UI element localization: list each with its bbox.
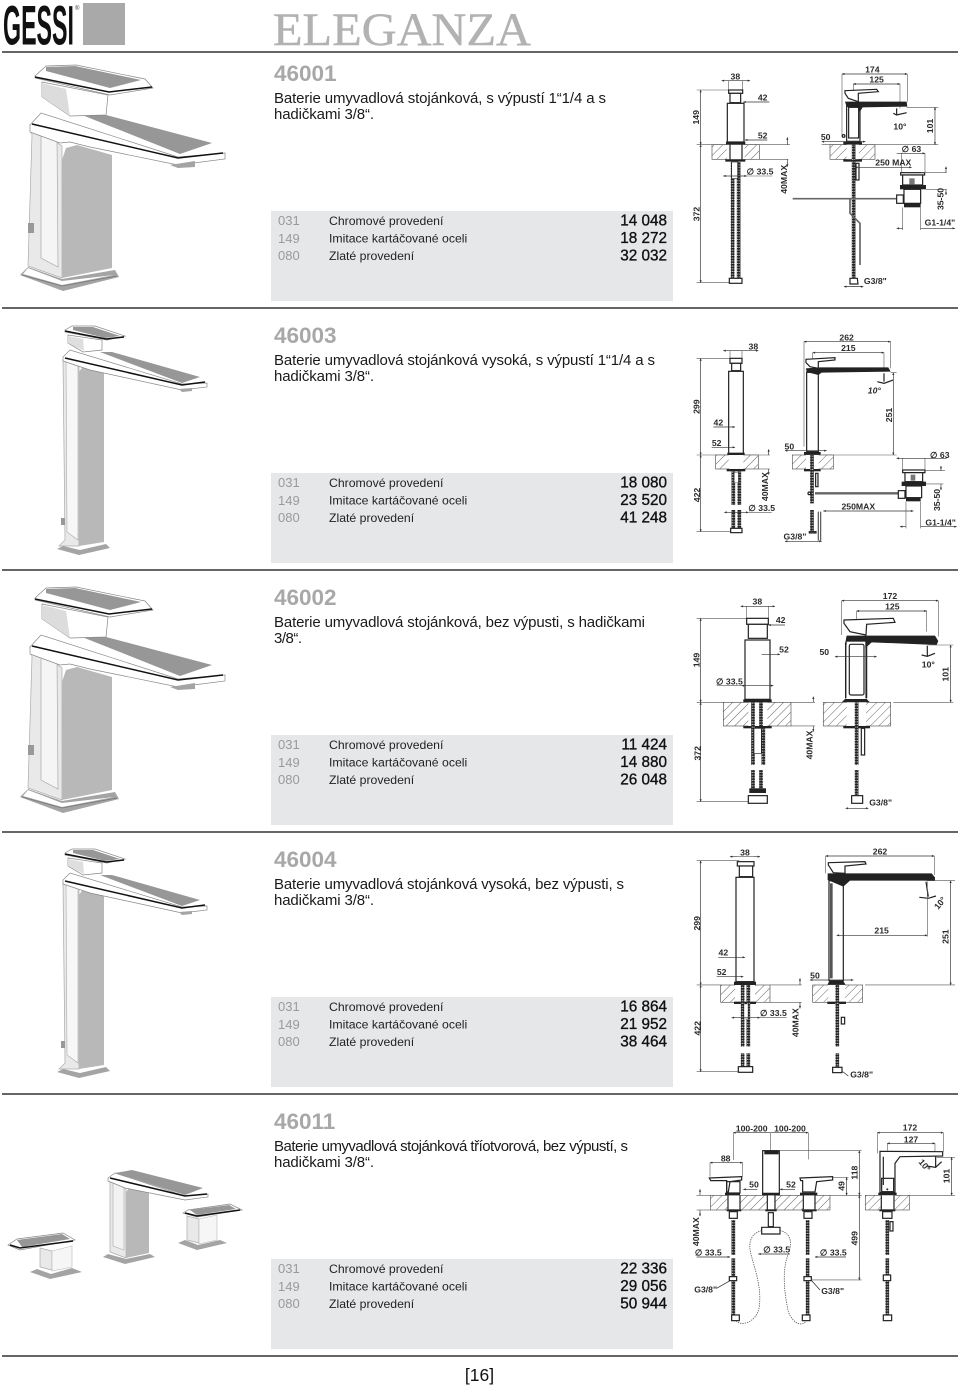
description — [274, 90, 606, 123]
price table: Chromové provedení — [329, 738, 444, 752]
technical drawing: 172 — [903, 1123, 917, 1133]
technical drawing: 40MAX — [760, 472, 770, 501]
price table: 149 — [278, 1279, 300, 1294]
price table — [271, 997, 673, 1087]
title: ELEGANZA: ELEGANZA — [273, 4, 531, 56]
technical drawing: 42 — [776, 615, 786, 625]
price table: 23 520 — [620, 492, 667, 509]
technical drawing: 35-50 — [935, 188, 945, 210]
price table: 149 — [278, 493, 300, 508]
price table: Chromové provedení — [329, 1000, 444, 1014]
technical drawing: 250MAX — [841, 501, 875, 511]
technical drawing — [692, 591, 953, 808]
technical drawing: 125 — [885, 601, 900, 611]
price table: Zlaté provedení — [329, 1035, 415, 1049]
price table: 080 — [278, 1034, 300, 1049]
price table — [271, 735, 673, 825]
price table: 26 048 — [620, 772, 667, 788]
price table: Imitace kartáčované oceli — [329, 494, 467, 508]
description: Baterie umyvadlová stojánková tříotvorová, bez výpustí, s — [274, 1138, 628, 1155]
technical drawing: 10° — [868, 385, 881, 395]
technical drawing: 299 — [692, 916, 702, 931]
price table: Imitace kartáčované oceli — [329, 1018, 467, 1032]
technical drawing: 127 — [904, 1134, 918, 1144]
price table: 22 336 — [620, 1260, 667, 1278]
description: hadičkami 3/8“. — [274, 106, 374, 123]
technical drawing: 42 — [714, 418, 723, 428]
price table: 149 — [278, 231, 300, 246]
technical drawing: 149 — [691, 110, 701, 125]
right handle — [178, 1204, 242, 1250]
technical drawing: 40MAX — [779, 165, 789, 194]
product number: 46002 — [274, 585, 337, 610]
technical drawing: 372 — [692, 746, 702, 761]
description: Baterie umyvadlová stojánková vysoká, bez výpusti, s — [274, 876, 624, 893]
spout — [103, 1170, 208, 1264]
price table: Imitace kartáčované oceli — [329, 232, 467, 246]
technical drawing: 172 — [883, 591, 897, 601]
technical drawing: 52 — [786, 1179, 796, 1189]
technical drawing: G3/8" — [784, 531, 806, 541]
technical drawing: ∅ 33.5 — [747, 167, 774, 177]
technical drawing: G3/8" — [694, 1284, 717, 1294]
logo: GESSI: ® — [75, 5, 80, 12]
technical drawing — [692, 847, 955, 1080]
technical drawing: 299 — [691, 399, 701, 414]
technical drawing: 215 — [874, 925, 889, 935]
price table: 16 864 — [620, 998, 667, 1016]
technical drawing: 101 — [941, 1169, 951, 1183]
technical drawing: 499 — [849, 1231, 859, 1246]
technical drawing: 251 — [941, 929, 951, 944]
price table: Zlaté provedení — [329, 511, 415, 525]
technical drawing: 100-200 — [736, 1123, 768, 1133]
technical drawing: 125 — [869, 75, 884, 85]
price table: 149 — [278, 1017, 300, 1032]
description: 3/8“. — [274, 630, 302, 647]
price table: 14 048 — [620, 212, 667, 230]
technical drawing: ∅ 33.5 — [695, 1247, 722, 1257]
description: Baterie umyvadlová stojánková, s výpustí 1“1/4 a s — [274, 90, 606, 107]
technical drawing: 38 — [731, 71, 740, 81]
price table: Chromové provedení — [329, 214, 444, 228]
price table: 21 952 — [620, 1016, 667, 1033]
icon: faucet photo — [20, 65, 225, 291]
price table: 50 944 — [620, 1296, 667, 1312]
product number: 46004 — [274, 847, 337, 872]
product number: 46011 — [274, 1109, 335, 1134]
technical drawing: ∅ 63 — [902, 144, 921, 154]
technical drawing: 250 MAX — [875, 157, 912, 167]
technical drawing: 40MAX — [791, 1008, 801, 1037]
price table: 32 032 — [620, 248, 667, 264]
technical drawing: 372 — [692, 207, 702, 221]
price table: 080 — [278, 510, 300, 525]
price table: 031 — [278, 737, 300, 752]
technical drawing: 40MAX — [805, 730, 815, 759]
technical drawing: 50 — [819, 647, 829, 657]
technical drawing: 10° — [893, 121, 907, 131]
technical drawing: 10° — [932, 894, 948, 911]
icon: tall faucet photo — [57, 326, 207, 555]
description: hadičkami 3/8“. — [274, 1154, 374, 1171]
technical drawing: 52 — [712, 438, 722, 448]
technical drawing: G3/8" — [864, 276, 887, 286]
technical drawing — [691, 1123, 955, 1324]
technical drawing: 52 — [717, 967, 727, 977]
technical drawing: 38 — [753, 597, 762, 607]
description — [274, 614, 645, 647]
product number: 46003 — [274, 323, 337, 348]
technical drawing: G3/8" — [821, 1286, 844, 1296]
price table: 29 056 — [620, 1278, 667, 1295]
price table: Zlaté provedení — [329, 1297, 415, 1311]
icon: tall faucet photo — [57, 849, 207, 1078]
technical drawing: 50 — [785, 441, 794, 451]
technical drawing: 50 — [821, 132, 831, 142]
price table: 149 — [278, 755, 300, 770]
description — [274, 1138, 628, 1171]
technical drawing: 251 — [884, 408, 894, 422]
technical drawing: ∅ 33.5 — [763, 1244, 790, 1254]
price table: 080 — [278, 1296, 300, 1311]
description: hadičkami 3/8“. — [274, 892, 374, 909]
technical drawing: 422 — [693, 1021, 703, 1036]
icon: faucet photo — [20, 587, 225, 813]
technical drawing: ∅ 63 — [930, 450, 950, 460]
technical drawing: 10° — [922, 659, 935, 669]
price table: 031 — [278, 999, 300, 1014]
technical drawing: ∅ 33.5 — [748, 503, 775, 513]
description: hadičkami 3/8“. — [274, 368, 374, 385]
technical drawing: 262 — [873, 847, 887, 857]
page number: [16] — [465, 1365, 494, 1385]
technical drawing: 40MAX — [691, 1217, 701, 1246]
price table: 18 080 — [620, 474, 667, 492]
icon: three-hole faucet photo — [8, 1170, 242, 1279]
technical drawing: 10° — [917, 1157, 933, 1174]
technical drawing: ∅ 33.5 — [716, 676, 743, 686]
technical drawing: 38 — [740, 847, 750, 857]
technical drawing — [691, 332, 957, 541]
technical drawing — [691, 65, 955, 287]
technical drawing: 262 — [839, 332, 854, 342]
description: Baterie umyvadlová stojánková vysoká, s výpustí 1“1/4 a s — [274, 352, 655, 369]
technical drawing: 35-50 — [932, 489, 942, 511]
price table: Chromové provedení — [329, 1262, 444, 1276]
price table: 080 — [278, 772, 300, 787]
technical drawing: 149 — [692, 653, 702, 667]
technical drawing: 49 — [837, 1181, 847, 1191]
price table: 11 424 — [621, 736, 667, 754]
price table: Imitace kartáčované oceli — [329, 756, 467, 770]
technical drawing: 38 — [749, 341, 758, 351]
technical drawing: 100-200 — [774, 1123, 806, 1133]
technical drawing: 422 — [692, 488, 702, 502]
price table: 14 880 — [620, 754, 667, 771]
technical drawing: 118 — [849, 1165, 859, 1180]
technical drawing: 101 — [941, 667, 951, 682]
description: Baterie umyvadlová stojánková, bez výpusti, s hadičkami — [274, 614, 645, 631]
technical drawing: G3/8" — [869, 798, 892, 808]
product: 46003 — [57, 323, 957, 563]
technical drawing: 50 — [749, 1179, 759, 1189]
price table: 080 — [278, 248, 300, 263]
price table: 38 464 — [620, 1034, 667, 1050]
description — [274, 352, 655, 385]
price table — [271, 1259, 673, 1349]
product: 46011 — [8, 1109, 955, 1349]
price table — [271, 473, 673, 563]
price table: 031 — [278, 475, 300, 490]
technical drawing: G1-1/4" — [925, 218, 955, 228]
technical drawing: 52 — [779, 645, 789, 655]
technical drawing: 215 — [841, 343, 856, 353]
product number: 46001 — [274, 61, 337, 86]
header — [3, 0, 531, 56]
product: 46002 — [20, 585, 953, 825]
price table — [271, 211, 673, 301]
price table: 18 272 — [620, 230, 667, 247]
price table: 031 — [278, 1261, 300, 1276]
price table: 41 248 — [620, 510, 667, 526]
technical drawing: ∅ 33.5 — [820, 1247, 847, 1257]
description — [274, 876, 624, 909]
technical drawing: 50 — [810, 970, 820, 980]
technical drawing: 174 — [865, 65, 880, 75]
price table: Zlaté provedení — [329, 249, 415, 263]
technical drawing: 42 — [758, 93, 768, 103]
product: 46004 — [57, 847, 955, 1087]
technical drawing: 42 — [719, 947, 728, 957]
left handle — [8, 1233, 82, 1279]
price table: Chromové provedení — [329, 476, 444, 490]
technical drawing: 88 — [721, 1153, 731, 1163]
technical drawing: 52 — [758, 131, 768, 141]
technical drawing: G3/8" — [850, 1070, 873, 1080]
price table: Imitace kartáčované oceli — [329, 1280, 467, 1294]
price table: 031 — [278, 213, 300, 228]
price table: Zlaté provedení — [329, 773, 415, 787]
product: 46001 — [20, 61, 955, 301]
technical drawing: 101 — [925, 119, 935, 133]
technical drawing: G1-1/4" — [925, 517, 956, 527]
technical drawing: ∅ 33.5 — [760, 1008, 787, 1018]
